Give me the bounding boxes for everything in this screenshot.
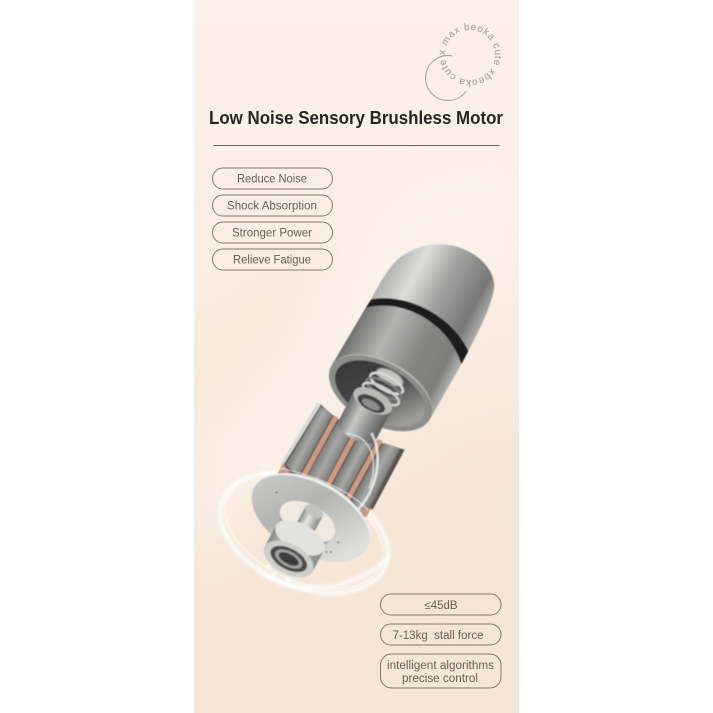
pill: relieve fatigue: Relieve Fatigue xyxy=(233,254,311,266)
airflow swirl ring: back xyxy=(202,450,406,616)
pill: shock absorption: Shock Absorption xyxy=(227,200,317,212)
hub base xyxy=(272,461,371,530)
upper housing cylinder xyxy=(369,222,510,355)
pill: control: precise control xyxy=(402,673,478,685)
pill: noise level: ≤45dB xyxy=(424,600,458,612)
logo stamp: circular brand text: x max beoka cute xbeoka cute xyxy=(440,23,502,88)
shaft neck xyxy=(272,492,342,555)
stator slabs xyxy=(284,404,334,477)
title: Low Noise Sensory Brushless Motor xyxy=(209,108,503,128)
spring and bearing xyxy=(360,362,411,410)
panel: peach background xyxy=(194,0,519,713)
pill: control xyxy=(380,654,501,688)
pill: stronger power: Stronger Power xyxy=(232,228,312,240)
housing opening xyxy=(316,338,445,447)
feature pills xyxy=(212,168,332,270)
rotor with copper windings xyxy=(269,400,405,533)
spec pills xyxy=(380,594,501,688)
logo stamp: circular brand text xyxy=(425,23,502,101)
rotor shaft collar xyxy=(334,381,396,449)
airflow swirl ring: front xyxy=(256,465,390,588)
mounting disc xyxy=(237,455,385,580)
pill: reduce noise: Reduce Noise xyxy=(237,174,307,186)
glass swirl around rotor xyxy=(328,433,395,527)
pill: stall force: 7-13kg stall force xyxy=(392,630,484,642)
end bearing xyxy=(258,513,330,585)
motor illustration xyxy=(225,215,512,602)
water droplets xyxy=(266,564,291,583)
copper strips xyxy=(299,416,380,509)
pill: control: intelligent algorithms xyxy=(387,660,494,672)
lower housing cylinder xyxy=(321,290,473,440)
black band xyxy=(363,284,477,365)
